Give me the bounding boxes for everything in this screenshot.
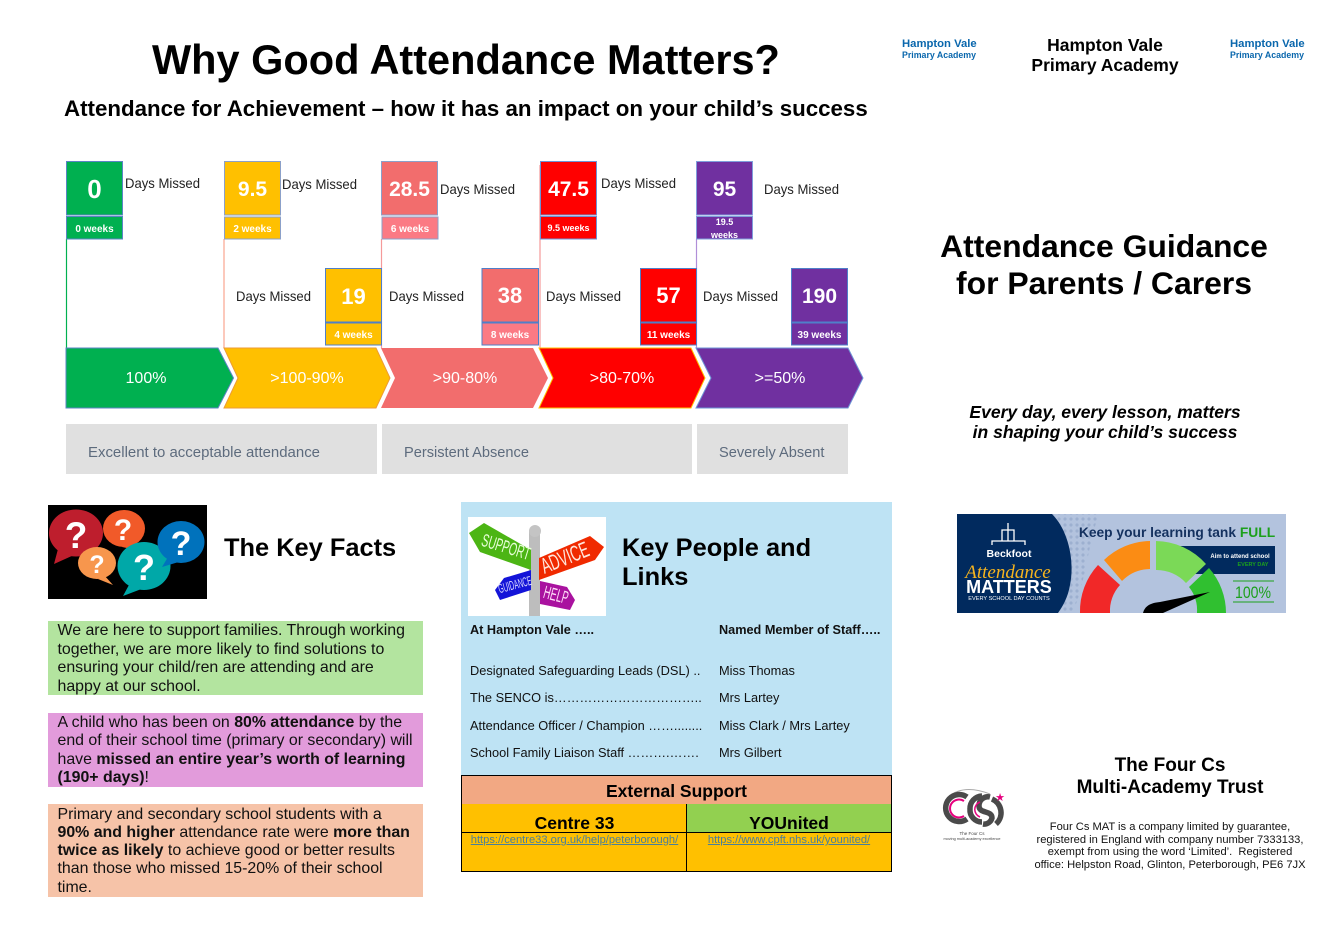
row: family liaison: School Family Liaison Staff ……….……. [470,745,699,760]
heading: key people: Key People and [622,534,811,562]
panel: 80% attendance: (190+ days)! [58,769,149,786]
heading: the four Cs trust: Multi-Academy Trust [1077,777,1263,798]
stat: 47.5 days: 9.5 weeks [547,223,590,233]
company information [1034,821,1306,871]
stat: 9.5 days [224,162,357,239]
banner: attendance matters: Aim to attend school [1210,554,1270,560]
school name: Primary Academy [1031,55,1179,75]
panel: key people and links: Miss Thomas [719,663,795,678]
subtitle: Attendance for Achievement – how it has an impact on your child’s success [64,96,868,121]
stat: 47.5 days [540,162,676,239]
stat: 47.5 days: 47.5 [548,178,589,201]
company information: office: Helpston Road, Glinton, Peterborough, PE6 7JX [1034,859,1306,871]
cell: Centre 33: https://centre33.org.uk/help/peterborough/ [471,834,678,846]
arrow: 80-70%: >80-70% [590,370,654,387]
panel: support families [48,621,423,695]
company information: exempt from using the word ‘Limited’. Registered [1048,846,1292,858]
stat: 38 days: 8 weeks [491,330,530,341]
title: Why Good Attendance Matters? [152,36,780,83]
icon: question mark bubbles [48,505,207,599]
logo: the four Cs: The Four Cs [959,831,985,836]
company information: registered in England with company number 7333133, [1037,834,1303,846]
stat: 19 days: 19 [341,284,366,309]
stat: 9.5 days: Days Missed [282,177,357,192]
icon: question mark bubbles: ? [65,515,87,556]
arrow: 100%: 100% [126,370,166,387]
stat: 0 days: 0 [87,174,102,204]
stat: 28.5 days: 6 weeks [391,224,430,235]
logo: the four Cs: moving multi-academy excellence [944,837,1000,841]
stat: 28.5 days: 28.5 [389,178,430,201]
logo: Hampton Vale right: Primary Academy [1230,50,1304,60]
stat: 0 days [66,162,200,239]
banner: attendance matters [957,514,1286,613]
stat: 190 days: 190 [802,285,837,308]
cell: YOUnited [686,804,892,872]
panel: support families: together, we are more likely to find solutions to [58,641,384,658]
attendance chart [66,161,864,474]
panel: support families: We are here to support families. Through working [58,622,405,639]
stat: 57 days: 57 [656,283,681,308]
panel: 90% and higher: Primary and secondary school students with a [58,806,382,823]
cell: Centre 33 [461,804,688,872]
stat: 28.5 days: Days Missed [440,182,515,197]
band: persistent absence: Persistent Absence [404,445,529,461]
stat: 57 days [546,268,696,345]
banner: attendance matters: EVERY DAY [1238,562,1269,568]
table headers: At Hampton Vale ….. [470,623,594,637]
banner: attendance matters: Attendance [963,562,1051,583]
panel: support families: ensuring your child/ren are attending and are [58,659,374,676]
header: external support: External Support [606,781,747,801]
school name: Hampton Vale [1047,35,1163,55]
panel: 90% and higher: 90% and higher attendance rate were more than [58,824,410,841]
panel: support families: happy at our school. [58,678,201,695]
icon: signpost: SUPPORT [479,530,533,564]
banner: attendance matters: Keep your learning tank FULL [1079,525,1275,540]
stat: 190 days: 39 weeks [798,330,842,341]
table: external support [461,775,892,872]
banner: attendance matters: Beckfoot [987,548,1032,560]
icon: question mark bubbles: ? [133,547,155,588]
stat: 190 days [703,268,848,345]
panel: 90% and higher: twice as likely to achieve good or better results [58,842,395,859]
stat: 95 days: 19.5 [716,217,733,227]
stat: 0 days: Days Missed [125,176,200,191]
stat: 19 days [236,268,382,345]
stat: 38 days [389,268,538,345]
stat: 57 days: 11 weeks [647,330,691,341]
logo: the four Cs [942,789,1005,841]
panel: 90% and higher: than those who missed 15-20% of their school [58,860,383,877]
panel: 80% attendance: A child who has been on 80% attendance by the [58,714,402,731]
panel: key people and links: Mrs Lartey [719,690,779,705]
heading: the key facts: The Key Facts [224,534,396,562]
heading: attendance guidance: for Parents / Carers [956,265,1252,301]
panel: key people and links: Miss Clark / Mrs Lartey [719,718,850,733]
connector lines [66,165,696,348]
panel: key people and links: Mrs Gilbert [719,745,782,760]
heading: key people: Links [622,563,688,591]
arrow: 90-80%: >90-80% [433,370,497,387]
icon: signpost: GUIDANCE [497,573,533,596]
stat: 9.5 days: 9.5 [238,178,267,201]
cell: YOUnited: https://www.cpft.nhs.uk/younited/ [708,834,870,846]
school name [1031,35,1179,75]
heading: the four Cs trust [1077,755,1264,798]
band: severely absent [697,424,848,474]
banner: attendance matters: EVERY SCHOOL DAY COUNTS [968,596,1050,602]
tagline: in shaping your child’s success [973,422,1237,442]
stat: 190 days: Days Missed [703,289,778,304]
stat: 38 days: Days Missed [389,289,464,304]
stat: 9.5 days: 2 weeks [233,224,272,235]
heading: the four Cs trust: The Four Cs [1115,755,1225,776]
heading: attendance guidance: Attendance Guidance [940,228,1268,264]
heading: attendance guidance [940,228,1268,301]
tagline [969,402,1241,442]
icon: question mark bubbles: ? [171,525,191,563]
band: excellent [66,424,377,474]
row: DSL: Designated Safeguarding Leads (DSL) .. [470,663,700,678]
stat: 95 days [696,162,839,240]
band: persistent absence [382,424,692,474]
panel: 80% attendance: end of their school time (primary or secondary) will [58,732,413,749]
icon: question mark bubbles: ? [89,551,105,579]
stat: 19 days: Days Missed [236,289,311,304]
stat: 47.5 days: Days Missed [601,176,676,191]
arrow: 100-90%: >100-90% [270,370,344,387]
banner: attendance matters: MATTERS [966,577,1052,597]
logo: Hampton Vale left: Hampton Vale [902,38,977,50]
icon: signpost: HELP [541,582,571,608]
logo: Hampton Vale right: Hampton Vale [1230,38,1305,50]
stat: 57 days: Days Missed [546,289,621,304]
stat: 28.5 days [382,162,515,239]
arrow: 50% [696,348,863,408]
stat: 19 days: 4 weeks [334,330,373,341]
arrow: 90-80% [381,348,548,408]
arrow: 80-70% [539,348,705,408]
panel: 80% attendance: have missed an entire year’s worth of learning [58,751,405,768]
arrow: 100% [66,348,234,408]
header: external support [461,775,892,805]
stat: 95 days: 95 [713,178,736,201]
cell: Centre 33: Centre 33 [535,813,614,833]
stat: 38 days: 38 [498,283,522,308]
logo: Hampton Vale left [902,38,977,60]
band: excellent: Excellent to acceptable attendance [88,445,320,461]
banner: attendance matters: 100% [1235,583,1271,602]
arrow: 100-90% [224,348,390,408]
stat: 95 days: Days Missed [764,182,839,197]
logo: Hampton Vale right [1230,38,1305,60]
panel: 90% and higher [48,804,423,897]
icon: signpost [468,517,606,616]
panel: 90% and higher: time. [58,879,92,896]
company information: Four Cs MAT is a company limited by guarantee, [1050,821,1290,833]
heading: key people [622,534,811,591]
icon: question mark bubbles: ? [114,514,132,547]
logo: the four Cs: ★ [995,792,1005,804]
cell: YOUnited: YOUnited [749,813,829,833]
panel: key people and links [461,502,892,775]
stat: 0 days: 0 weeks [75,224,114,235]
tagline: Every day, every lesson, matters [969,402,1241,422]
arrow: 50%: >=50% [755,370,805,387]
band: severely absent: Severely Absent [719,445,824,461]
stat: 95 days: weeks [710,230,738,240]
panel: key people and links: Named Member of Staff….. [719,623,880,637]
panel: 80% attendance [48,713,423,787]
row: SENCO: The SENCO is…………………………….. [470,690,702,705]
row: attendance officer: Attendance Officer / Champion ……........ [470,718,702,733]
logo: Hampton Vale left: Primary Academy [902,50,976,60]
